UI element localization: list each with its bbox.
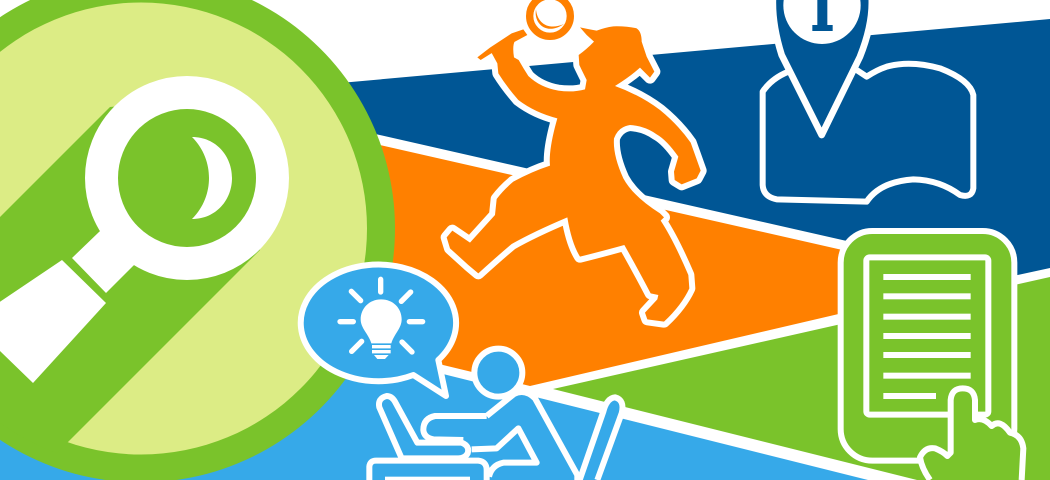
long shadow bbox=[0, 106, 260, 442]
icon: book with location pin bbox=[763, 0, 973, 202]
person head bbox=[474, 349, 522, 397]
band: dark blue bbox=[340, 19, 1050, 309]
lens crescent bbox=[536, 9, 564, 29]
band: light blue bbox=[0, 340, 868, 480]
magnifier lens bbox=[530, 0, 570, 36]
pin circle bbox=[783, 0, 861, 44]
person outline bbox=[423, 392, 577, 480]
pointing hand bbox=[920, 388, 1023, 480]
desk panel bbox=[385, 477, 470, 480]
lens glint bbox=[192, 137, 232, 219]
band: orange bbox=[340, 136, 860, 386]
text lines bbox=[883, 274, 971, 399]
bulb base bbox=[372, 345, 391, 359]
magnifying glass badge bbox=[0, 0, 395, 480]
icon: person with idea bubble bbox=[301, 265, 622, 480]
lens ring bbox=[102, 92, 272, 264]
band: green bbox=[553, 277, 1050, 480]
chair back bbox=[580, 397, 622, 480]
pin letter I bbox=[812, 0, 833, 31]
lightbulb bbox=[340, 279, 423, 359]
icon: detective figure bbox=[447, 0, 701, 322]
badge inner disc bbox=[0, 2, 367, 454]
handle neck bbox=[72, 220, 145, 293]
bulb glass bbox=[361, 299, 402, 343]
desk bbox=[369, 461, 487, 480]
bulb rays bbox=[340, 279, 423, 352]
handle grip bbox=[0, 260, 106, 383]
location pin bbox=[773, 0, 872, 135]
tablet body bbox=[841, 231, 1014, 461]
badge outer ring bbox=[0, 0, 395, 480]
person torso and arm bbox=[423, 392, 577, 480]
tablet screen bbox=[866, 257, 988, 415]
icon: e-reader tablet with hand bbox=[841, 231, 1023, 480]
magnifier handle bbox=[477, 29, 527, 60]
detective body bbox=[447, 26, 701, 322]
speech bubble bbox=[301, 265, 456, 396]
laptop screen and base bbox=[379, 396, 468, 458]
open book outline bbox=[763, 64, 973, 202]
